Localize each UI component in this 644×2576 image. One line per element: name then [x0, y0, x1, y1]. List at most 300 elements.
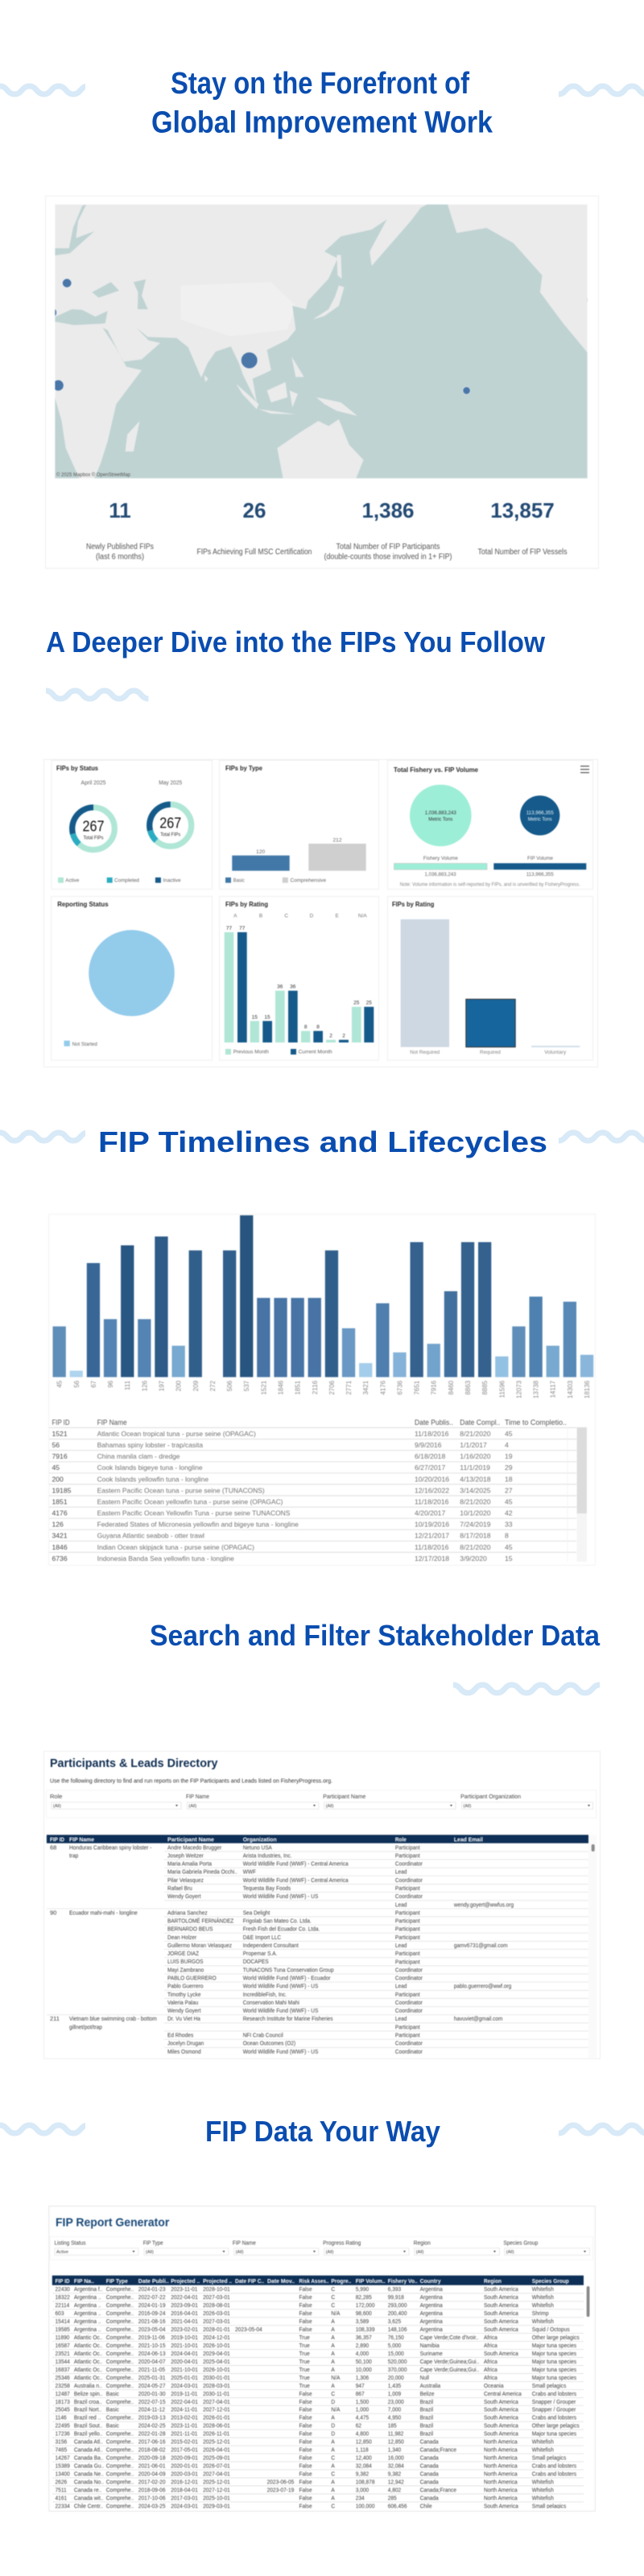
section 2: deeper dive	[43, 625, 597, 1067]
report rows: 1,009	[388, 2392, 401, 2397]
table header: Risk Asses..	[299, 2277, 328, 2285]
report rows: South America	[484, 2504, 518, 2510]
rows: roles: Participant	[395, 1853, 420, 1860]
report rows: Basic	[106, 2392, 119, 2397]
report rows: Snapper / Grouper	[532, 2407, 576, 2413]
rows: participant names: Jocelyn Drugan	[167, 2041, 204, 2047]
report rows: A	[331, 2439, 335, 2446]
table rows: 4/13/2018	[460, 1475, 491, 1483]
report rows: Brazil Sout..	[74, 2423, 102, 2429]
rows: participant names: Valeria Palau	[167, 2000, 198, 2006]
report rows: 18322	[55, 2295, 70, 2301]
table header: FIP Name	[69, 1835, 94, 1843]
filter bar: FIP Type	[143, 2240, 163, 2246]
report rows: 23,000	[388, 2399, 404, 2405]
wave decoration right	[559, 2125, 644, 2133]
table rows: 1521	[52, 1430, 68, 1438]
report rows: 2022-07-15	[138, 2399, 166, 2405]
report rows: 520,000	[388, 2359, 407, 2365]
report rows: Cape Verde;Cote d'Ivoir..	[420, 2335, 479, 2341]
title: Global Improvement Work	[151, 106, 493, 140]
rating headers: E	[336, 913, 340, 919]
filter bar: Progress Rating	[323, 2240, 361, 2246]
report rows: Argentina ..	[74, 2295, 101, 2301]
report rows: 2015-02-01	[171, 2439, 198, 2446]
rows: organizations: Propemar S.A.	[243, 1951, 277, 1957]
table header	[52, 2276, 584, 2285]
report rows: 2021-06-01	[138, 2463, 166, 2470]
report rows: 2017-05-01	[171, 2447, 198, 2454]
report rows: 2023-11-01	[171, 2423, 197, 2429]
rows: roles: Lead	[395, 1943, 407, 1949]
table rows: Atlantic Ocean tropical tuna - purse seine (OPAGAC)	[97, 1430, 256, 1438]
report rows: Crabs and lobsters	[532, 2471, 577, 2478]
table rows: 12/17/2018	[415, 1554, 449, 1563]
table rows: Indonesia Banda Sea yellowfin tuna - longline	[97, 1554, 234, 1563]
scrollbar	[592, 1844, 595, 1852]
filter bar: (All)	[326, 2250, 334, 2255]
report rows: 2021-10-15	[138, 2343, 166, 2349]
report rows: 293,000	[388, 2303, 407, 2309]
bar chart: requirement: Not Required	[410, 1050, 440, 1055]
report rows: A	[331, 2351, 335, 2357]
report rows: 4,000	[356, 2351, 369, 2357]
report rows: 20,000	[388, 2376, 404, 2381]
card: total fishery vs FIP volume	[388, 760, 592, 889]
report rows: True	[299, 2351, 310, 2357]
table rows: 45	[505, 1543, 513, 1551]
rating headers: D	[310, 913, 314, 919]
report rows: 22430	[55, 2287, 70, 2293]
report rows: 2023-09-01	[171, 2303, 198, 2309]
stat: FIP participants: (double-counts those involved in 1+ FIP)	[324, 552, 452, 562]
rows: organizations: Ocean Outcomes (O2)	[243, 2041, 295, 2047]
report rows: Comprehe..	[106, 2359, 134, 2365]
report rows: C	[331, 2295, 335, 2301]
report rows: False	[299, 2455, 312, 2462]
report rows: 9,382	[388, 2471, 401, 2478]
report rows: 76,150	[388, 2335, 404, 2341]
table header: FIP Volum..	[356, 2277, 386, 2285]
card: total fishery vs FIP volume: 113,966,355	[526, 872, 554, 877]
report rows: 2026-11-01	[203, 2431, 229, 2438]
report rows: North America	[484, 2463, 518, 2470]
rows: organizations: IncredibleFish, Inc.	[243, 1992, 287, 1998]
report rows: Comprehe..	[106, 2384, 134, 2389]
report rows: Crabs and lobsters	[532, 2463, 577, 2470]
report rows: Null	[420, 2376, 429, 2381]
report rows: Canada	[420, 2479, 439, 2486]
table rows: 4	[505, 1441, 509, 1449]
stat: FIP vessels: Total Number of FIP Vessels	[478, 547, 567, 557]
report rows: 2020-09-01	[171, 2455, 198, 2462]
wave decoration left	[0, 1133, 88, 1141]
stat: newly published FIPs: (last 6 months)	[96, 552, 144, 562]
report rows: 2023-05-04	[235, 2327, 262, 2333]
report rows: Comprehe..	[106, 2487, 134, 2494]
report rows: 2024-02-25	[138, 2423, 166, 2429]
report rows: Major tuna species	[532, 2368, 577, 2373]
report rows: 2020-01-30	[138, 2392, 166, 2397]
bubble: fishery volume	[410, 785, 472, 846]
axis labels: FIP IDs	[56, 1380, 591, 1398]
report rows: False	[299, 2463, 312, 2470]
report rows: Small pelagics	[532, 2504, 567, 2510]
report rows: 148,106	[388, 2327, 407, 2333]
report rows: 100,000	[356, 2504, 375, 2510]
table rows: 19	[505, 1452, 513, 1460]
report rows: 2026-07-01	[203, 2463, 230, 2470]
axis labels: FIP IDs: 200	[175, 1380, 183, 1391]
report rows: Brazil	[420, 2415, 433, 2421]
report rows: North America	[484, 2471, 518, 2478]
report rows: Major tuna species	[532, 2351, 577, 2357]
report rows: Crabs and lobsters	[532, 2415, 577, 2421]
report title: FIP Report Generator	[56, 2215, 169, 2230]
report rows: North America	[484, 2447, 518, 2454]
report rows: 2029-04-01	[203, 2351, 230, 2357]
scrollbar	[587, 2286, 589, 2317]
report rows: Cape Verde;Guinea;Gui..	[420, 2359, 479, 2365]
bar chart: requirement	[401, 919, 580, 1055]
report rows: C	[331, 2504, 335, 2510]
report rows: Whitefish	[532, 2487, 554, 2494]
panel: FIP report generator	[49, 2206, 595, 2512]
filter bar: (All)	[506, 2250, 514, 2255]
rows: participant names: Pablo Guerrero	[167, 1984, 204, 1990]
card: FIPs by rating (monthly)	[219, 897, 378, 1060]
report rows: 3156	[55, 2439, 67, 2446]
filter bar: (All)	[236, 2250, 244, 2255]
filter bar	[50, 2236, 592, 2260]
report rows: 2024-06-13	[138, 2351, 166, 2357]
bubble: fishery volume: Metric Tons	[428, 816, 453, 823]
report rows: 2026-04-01	[203, 2447, 230, 2454]
stat: newly published FIPs	[86, 498, 154, 562]
report rows: Belize spin..	[74, 2392, 102, 2397]
report rows: 2020-09-18	[138, 2455, 166, 2462]
directory table	[47, 1835, 597, 2058]
axis labels: FIP IDs: 96	[107, 1380, 114, 1388]
report rows: 3,000	[356, 2487, 369, 2494]
report rows: Whitefish	[532, 2287, 554, 2293]
table header: Role	[395, 1835, 407, 1843]
report rows: N/A	[331, 2376, 341, 2381]
report rows: 4161	[55, 2496, 67, 2502]
rows: participant names: Andre Macedo Brugger	[167, 1845, 222, 1851]
axis labels: FIP IDs: 2116	[312, 1380, 319, 1394]
legend: status: Active	[65, 877, 80, 884]
table header: FIP Type	[106, 2277, 128, 2285]
report rows: 16587	[55, 2343, 70, 2349]
report rows: 2026-01-01	[203, 2415, 230, 2421]
table header: Progre..	[331, 2277, 351, 2285]
wave decoration left	[0, 86, 88, 94]
axis labels: FIP IDs: 272	[209, 1380, 217, 1391]
stat: FIP vessels	[478, 498, 567, 557]
stat: FIP participants: 1,386	[361, 498, 415, 522]
table header: Projected ..	[203, 2277, 232, 2285]
report rows: 108,339	[356, 2327, 375, 2333]
report rows: Whitefish	[532, 2479, 554, 2486]
table rows: 1/1/2017	[460, 1441, 487, 1449]
panel: dashboard	[43, 760, 597, 1067]
report rows: Canada re..	[74, 2487, 101, 2494]
report rows: N/A	[331, 2311, 341, 2317]
bar chart: previous vs current month: 2	[342, 1034, 345, 1039]
report rows: Major tuna species	[532, 2359, 577, 2365]
report rows: Comprehe..	[106, 2335, 134, 2341]
rows: lead emails: pablo.guerrero@wwf.org	[454, 1984, 511, 1990]
report rows: 185	[388, 2423, 397, 2429]
report rows: 1,118	[356, 2447, 369, 2454]
bar chart: previous vs current month: 15	[252, 1014, 258, 1020]
report rows: 2022-07-22	[138, 2295, 166, 2301]
table rows: Eastern Pacific Ocean Yellowfin Tuna - purse seine TUNACONS	[97, 1509, 291, 1517]
axis labels: FIP IDs: 12073	[515, 1380, 522, 1398]
table header: Region	[484, 2277, 502, 2285]
report rows: 2023-02-01	[171, 2327, 198, 2333]
table rows: 4/20/2017	[415, 1509, 445, 1517]
report rows: True	[299, 2368, 310, 2373]
report rows: Whitefish	[532, 2295, 554, 2301]
table header: FIP ID	[55, 2277, 70, 2285]
heading: FIP Data Your Way	[205, 2115, 440, 2148]
table rows: 3/14/2025	[460, 1486, 491, 1494]
report rows: 2025-09-01	[203, 2455, 230, 2462]
table header: Organization	[243, 1835, 277, 1843]
axis labels: FIP IDs: 197	[158, 1380, 166, 1391]
bubble: FIP volume	[520, 795, 559, 836]
axis labels: FIP IDs: 1851	[295, 1380, 302, 1395]
report rows: Small pelagics	[532, 2455, 567, 2462]
axis labels: FIP IDs: 1521	[260, 1380, 267, 1395]
report rows: 32,084	[388, 2463, 404, 2470]
report rows: Comprehe..	[106, 2439, 134, 2446]
report rows: Other large pelagics	[532, 2423, 580, 2429]
axis labels: FIP IDs: 14303	[567, 1380, 574, 1398]
report rows: 22495	[55, 2423, 70, 2429]
report rows: Whitefish	[532, 2496, 554, 2502]
report rows: 23521	[55, 2351, 70, 2357]
report rows: 2030-11-01	[203, 2392, 229, 2397]
report rows: 7,000	[388, 2407, 401, 2413]
rows: lead emails: havuviet@gmail.com	[454, 2017, 503, 2022]
report rows: 14267	[55, 2455, 70, 2462]
bar chart: previous vs current month: 8	[304, 1025, 308, 1030]
table header: Participant Name	[167, 1835, 214, 1843]
report rows: Brazil	[420, 2407, 433, 2413]
bar chart: previous vs current month: 2	[329, 1034, 332, 1039]
table rows: 15	[505, 1554, 513, 1563]
report rows: 2027-03-01	[203, 2319, 230, 2325]
report rows: True	[299, 2335, 310, 2341]
report rows: True	[299, 2376, 310, 2381]
report rows: 2027-12-01	[203, 2487, 230, 2494]
rows: FIP id and name: Ecuador mahi-mahi - longline	[69, 1910, 138, 1917]
report rows: Australia	[420, 2384, 440, 2389]
bar chart: requirement: Required	[480, 1050, 501, 1055]
rows: participant names: Pilar Velasquez	[167, 1878, 204, 1884]
report rows: Central America	[484, 2392, 522, 2397]
report rows: 2016-04-01	[171, 2311, 198, 2317]
report rows: 2018-08-02	[138, 2447, 166, 2454]
report rows: 82,285	[356, 2295, 372, 2301]
rows: participant names: BARTOLOMÉ FERNÁNDEZ	[167, 1917, 234, 1925]
filter bar: (All)	[464, 1804, 471, 1809]
bar chart: previous vs current month: 25	[366, 1001, 372, 1006]
bubble: fishery volume: 1,036,883,243	[425, 810, 456, 816]
report rows: Comprehe..	[106, 2455, 134, 2462]
bar chart: previous vs current month: 36	[277, 985, 283, 990]
report rows: 2626	[55, 2479, 67, 2486]
table rows: Cook Islands yellowfin tuna - longline	[97, 1475, 208, 1483]
card: FIPs by type: 212	[333, 837, 342, 844]
report rows: C	[331, 2471, 335, 2478]
rows: participant names: Guillermo Moran Velasquez	[167, 1943, 232, 1949]
report rows: C	[331, 2392, 335, 2397]
report rows: 36,357	[356, 2335, 372, 2341]
bar chart: previous vs current month: 8	[316, 1025, 320, 1030]
legend: status	[58, 877, 181, 884]
rows: roles: Coordinator	[395, 2049, 423, 2055]
axis labels: FIP IDs: 506	[226, 1380, 233, 1391]
card: total fishery vs FIP volume: Note: Volume information is self-reported by FIPs, and is unverified by FisheryProgress.	[400, 882, 580, 887]
report rows: Whitefish	[532, 2439, 554, 2446]
axis labels: FIP IDs: 6736	[396, 1380, 404, 1395]
bar chart: previous vs current month	[225, 926, 374, 1042]
report rows: 2013-02-01	[171, 2415, 198, 2421]
report rows: 3,589	[356, 2319, 369, 2325]
report rows: 2022-04-01	[171, 2295, 198, 2301]
rows: roles: Participant	[395, 1951, 420, 1957]
report rows: Comprehe..	[106, 2399, 134, 2405]
report rows: A	[331, 2359, 335, 2365]
donut: April 2025: 267	[82, 819, 105, 835]
report rows: Major tuna species	[532, 2431, 577, 2438]
bubble: FIP volume: Metric Tons	[528, 816, 552, 823]
card: FIPs by type	[219, 760, 378, 889]
report rows: Comprehe..	[106, 2287, 134, 2293]
report rows: True	[299, 2384, 310, 2389]
card: FIPs by status	[52, 760, 213, 889]
donut: May 2025: 267	[159, 815, 181, 831]
report rows: Argentina	[420, 2287, 443, 2293]
report rows: 18173	[55, 2399, 70, 2405]
report rows: Brazil Nort..	[74, 2407, 101, 2413]
axis labels: FIP IDs: 8863	[464, 1380, 472, 1395]
report rows: Comprehe..	[106, 2504, 134, 2510]
card: FIPs by type: FIPs by Type	[225, 764, 262, 772]
report rows: Small pelagics	[532, 2384, 567, 2389]
rows: participant names: Mayi Zambrano	[167, 1967, 204, 1974]
axis labels: FIP IDs: 1846	[277, 1380, 285, 1395]
report rows: False	[299, 2327, 312, 2333]
report rows: A	[331, 2479, 335, 2486]
report rows: 1,435	[388, 2384, 401, 2389]
donut: May 2025: Total FIPs	[160, 832, 181, 838]
table rows: 200	[52, 1475, 64, 1483]
report rows: 2024-01-23	[138, 2287, 166, 2293]
axis labels: FIP IDs: 7916	[431, 1380, 438, 1395]
legend: months	[225, 1049, 332, 1055]
rows: organizations: WWF	[243, 1869, 256, 1876]
rows: roles: Coordinator	[395, 1894, 423, 1900]
filter bar: (All)	[326, 1804, 334, 1809]
report rows: False	[299, 2447, 312, 2454]
report rows: A	[331, 2415, 335, 2421]
rows: FIP id and name: 90	[50, 1909, 56, 1916]
table rows: 6/18/2018	[415, 1452, 445, 1460]
filter bar: Active	[56, 2250, 68, 2255]
table rows: 3/9/2020	[460, 1554, 487, 1563]
report rows: 12,942	[388, 2479, 404, 2486]
report rows: 2017-10-06	[138, 2496, 166, 2502]
report rows: Argentina	[420, 2295, 443, 2301]
card: reporting status: Reporting Status	[57, 900, 109, 908]
report rows: Argentina ..	[74, 2319, 101, 2325]
report rows: 4,475	[356, 2415, 369, 2421]
bar chart: previous vs current month: 36	[290, 985, 296, 990]
report rows: Canada;France	[420, 2487, 456, 2494]
table rows: Eastern Pacific Ocean tuna - purse seine (TUNACONS)	[97, 1486, 265, 1494]
card: total fishery vs FIP volume: 1,036,883,243	[425, 872, 456, 877]
filter bar: (All)	[188, 1804, 196, 1809]
report rows: 2024-11-12	[138, 2407, 165, 2413]
rows: organizations: Independent Consultant	[243, 1943, 299, 1949]
table header	[47, 1835, 588, 1843]
report rows: 2024-12-01	[203, 2335, 230, 2341]
wave decoration right	[559, 86, 644, 94]
report rows: Comprehe..	[106, 2351, 134, 2357]
table rows: 8/21/2020	[460, 1543, 491, 1551]
report rows: Comprehe..	[106, 2303, 134, 2309]
report rows: Comprehe..	[106, 2496, 134, 2502]
map	[52, 204, 589, 481]
table rows: 11/18/2016	[415, 1497, 449, 1505]
report rows: South America	[484, 2327, 518, 2333]
report rows: South America	[484, 2303, 518, 2309]
rows: roles: Coordinator	[395, 2000, 423, 2006]
report rows: Squid / Octopus	[532, 2327, 570, 2333]
axis labels: FIP IDs: 2706	[328, 1380, 336, 1395]
report rows: A	[331, 2463, 335, 2470]
report rows: Suriname	[420, 2351, 443, 2357]
rows: organizations: Tequesta Bay Foods	[243, 1886, 291, 1892]
rows: roles: Lead	[395, 2017, 407, 2022]
report rows: Atlantic Oc..	[74, 2359, 102, 2365]
rating headers: B	[259, 913, 262, 919]
report rows: Canada Ne..	[74, 2471, 104, 2478]
axis labels: FIP IDs: 2771	[345, 1380, 353, 1395]
rows: organizations: World Wildlife Fund (WWF) - US	[243, 1894, 319, 1900]
report rows: 2021-10-01	[171, 2343, 198, 2349]
report rows: Snapper / Grouper	[532, 2399, 576, 2405]
report rows: South America	[484, 2319, 518, 2325]
report rows: D	[331, 2399, 335, 2405]
report rows: 2027-12-01	[203, 2407, 230, 2413]
table: completed FIPs	[49, 1418, 587, 1563]
report rows: Argentina	[420, 2311, 443, 2317]
table rows: 6/27/2017	[415, 1463, 445, 1472]
report rows: Canada;France	[420, 2447, 456, 2454]
table rows: 56	[52, 1441, 60, 1449]
wave decoration	[46, 691, 148, 699]
rows: roles: Lead	[395, 1984, 407, 1990]
report rows: 603	[55, 2311, 64, 2317]
report rows: 2026-10-01	[203, 2368, 230, 2373]
axis labels: FIP IDs: 4176	[379, 1380, 386, 1395]
